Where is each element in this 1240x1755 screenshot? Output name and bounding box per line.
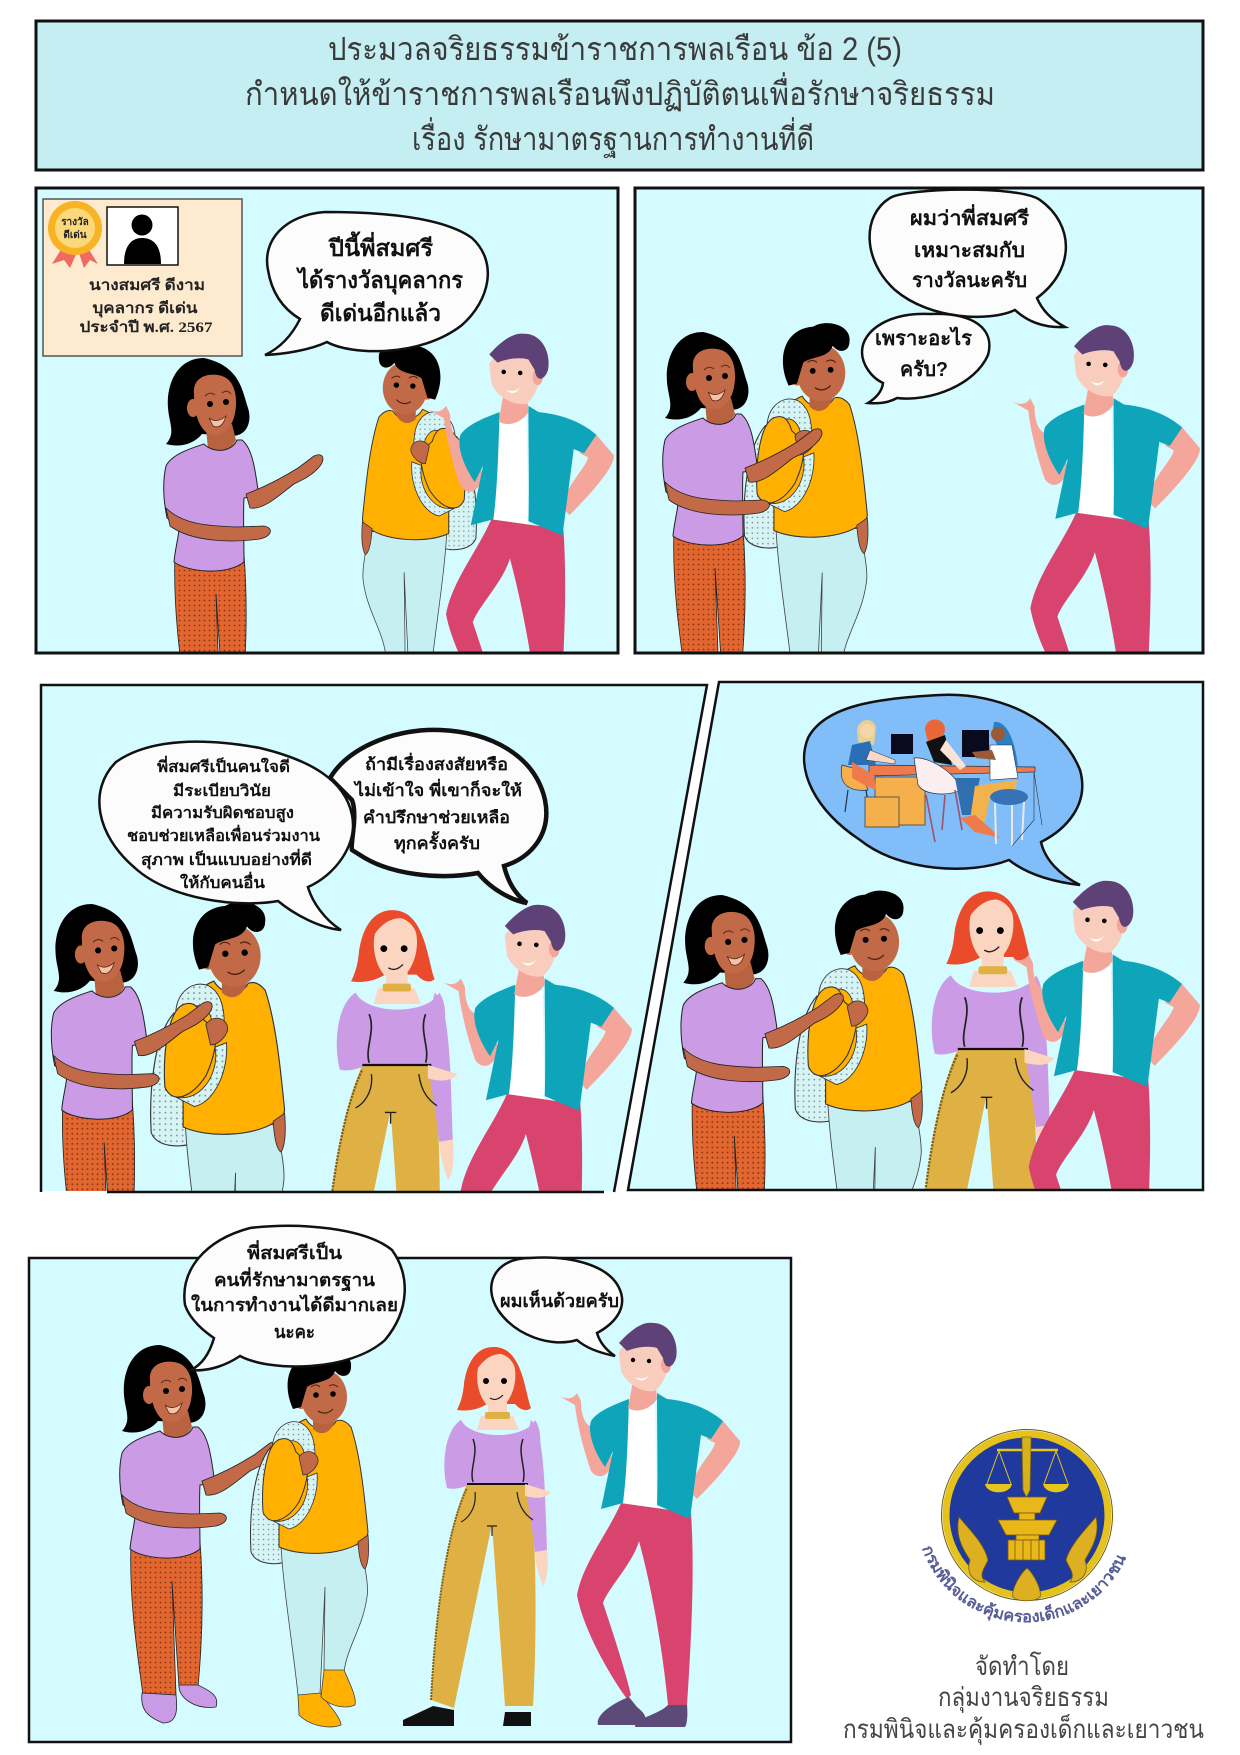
speech bubble: good qualities: พี่สมศรีเป็นคนใจดี xyxy=(157,755,290,776)
speech bubble: maintains standards: นะคะ xyxy=(274,1322,315,1342)
speech bubble: good qualities xyxy=(99,742,353,930)
character: man in teal shirt xyxy=(442,904,632,1191)
character: man in teal shirt xyxy=(1010,880,1200,1189)
speech bubble: suitable for award xyxy=(870,190,1066,327)
character: man in teal shirt xyxy=(1012,325,1200,652)
speech bubble: good qualities: สุภาพ เป็นแบบอย่างที่ดี xyxy=(141,848,312,870)
card text: ประจำปี พ.ศ. 2567 xyxy=(80,319,213,336)
logo: department seal xyxy=(922,1429,1126,1622)
illustration: office workers xyxy=(841,720,1042,846)
character: man with backpack xyxy=(361,346,477,652)
title line 2: กำหนดให้ข้าราชการพลเรือนพึงปฏิบัติตนเพื่อรักษาจริยธรรม xyxy=(245,72,995,112)
speech bubble: maintains standards: คนที่รักษามาตรฐาน xyxy=(214,1267,376,1292)
credit text: จัดทำโดย xyxy=(975,1651,1069,1681)
icon: tiered pedestal xyxy=(998,1497,1057,1560)
panel 3: describing her character xyxy=(40,684,708,1194)
speech bubble: why: เพราะอะไร xyxy=(875,326,972,350)
speech bubble: maintains standards: พี่สมศรีเป็น xyxy=(247,1240,343,1263)
character: man with backpack xyxy=(743,323,868,652)
speech bubble: good qualities: มีความรับผิดชอบสูง xyxy=(151,804,294,824)
speech bubble: award news xyxy=(265,212,488,355)
panel 5: conclusion xyxy=(29,1226,791,1742)
character: man with backpack xyxy=(251,1349,369,1727)
credit text xyxy=(843,1651,1204,1745)
character: red-haired woman xyxy=(924,891,1054,1189)
speech bubble: suitable for award: เหมาะสมกับ xyxy=(914,240,1025,262)
panel 1: award announcement xyxy=(34,186,620,654)
icon: profile photo xyxy=(107,207,178,265)
speech bubble: award news: ได้รางวัลบุคลากร xyxy=(295,266,464,295)
speech bubble: why xyxy=(862,314,989,403)
speech bubble: advice: ทุกครั้งครับ xyxy=(394,831,480,854)
speech bubble: good qualities: ชอบช่วยเหลือเพื่อนร่วมงาน xyxy=(127,824,320,845)
speech bubble: advice: คำปรึกษาช่วยเหลือ xyxy=(363,808,510,827)
character: woman xyxy=(50,904,213,1191)
speech bubble: suitable for award: ผมว่าพี่สมศรี xyxy=(910,203,1029,230)
character: woman xyxy=(680,895,844,1189)
icon: medal: ดีเด่น xyxy=(63,229,87,241)
character: red-haired woman xyxy=(403,1347,551,1726)
icon: medal xyxy=(48,201,102,268)
icon: naga ornaments and lotus xyxy=(958,1517,1097,1601)
icon: scales of justice xyxy=(985,1437,1069,1497)
speech bubble: good qualities: มีระเบียบวินัย xyxy=(173,782,271,800)
icon: medal: รางวัล xyxy=(61,216,89,228)
title line 1: ประมวลจริยธรรมข้าราชการพลเรือน ข้อ 2 (5) xyxy=(328,31,902,67)
credit text: กลุ่มงานจริยธรรม xyxy=(938,1682,1109,1713)
speech bubble: advice: ถ้ามีเรื่องสงสัยหรือ xyxy=(365,752,508,774)
character: woman xyxy=(662,332,822,652)
card text xyxy=(80,277,213,336)
character: woman xyxy=(120,1345,279,1723)
award card xyxy=(43,199,242,356)
speech bubble: suitable for award: รางวัลนะครับ xyxy=(912,270,1027,292)
character: man with backpack xyxy=(794,890,923,1189)
thought bubble: office scene xyxy=(804,695,1082,885)
speech bubble: why: ครับ? xyxy=(900,359,948,381)
title line 3: เรื่อง รักษามาตรฐานการทำงานที่ดี xyxy=(412,117,814,159)
card text: นางสมศรี ดีงาม xyxy=(89,277,205,294)
speech bubble: advice xyxy=(330,730,546,903)
card text: บุคลากร ดีเด่น xyxy=(92,300,198,318)
character: red-haired woman xyxy=(331,910,458,1191)
speech bubble: good qualities: ให้กับคนอื่น xyxy=(180,871,265,892)
speech bubble: maintains standards: ในการทำงานได้ดีมากเลย xyxy=(191,1294,398,1315)
speech bubble: award news: ดีเด่นอีกแล้ว xyxy=(320,300,441,326)
character: woman xyxy=(163,358,324,652)
speech bubble: award news: ปีนี้พี่สมศรี xyxy=(327,231,434,261)
header: title panel xyxy=(36,21,1203,170)
panel 2: why the award xyxy=(634,186,1204,654)
character: man in teal shirt xyxy=(428,334,614,652)
panel 4: working at office thought xyxy=(626,680,1204,1192)
speech bubble: agree: ผมเห็นด้วยครับ xyxy=(500,1289,619,1311)
character: man with backpack xyxy=(150,904,286,1191)
speech bubble: advice: ไม่เข้าใจ พี่เขาก็จะให้ xyxy=(353,778,522,800)
speech bubble: agree xyxy=(491,1257,622,1356)
character: man in teal shirt xyxy=(559,1323,740,1727)
speech bubble: maintains standards xyxy=(184,1226,405,1370)
logo caption arc: กรมพินิจและคุ้มครองเด็กและเยาวชน xyxy=(922,1546,1126,1622)
